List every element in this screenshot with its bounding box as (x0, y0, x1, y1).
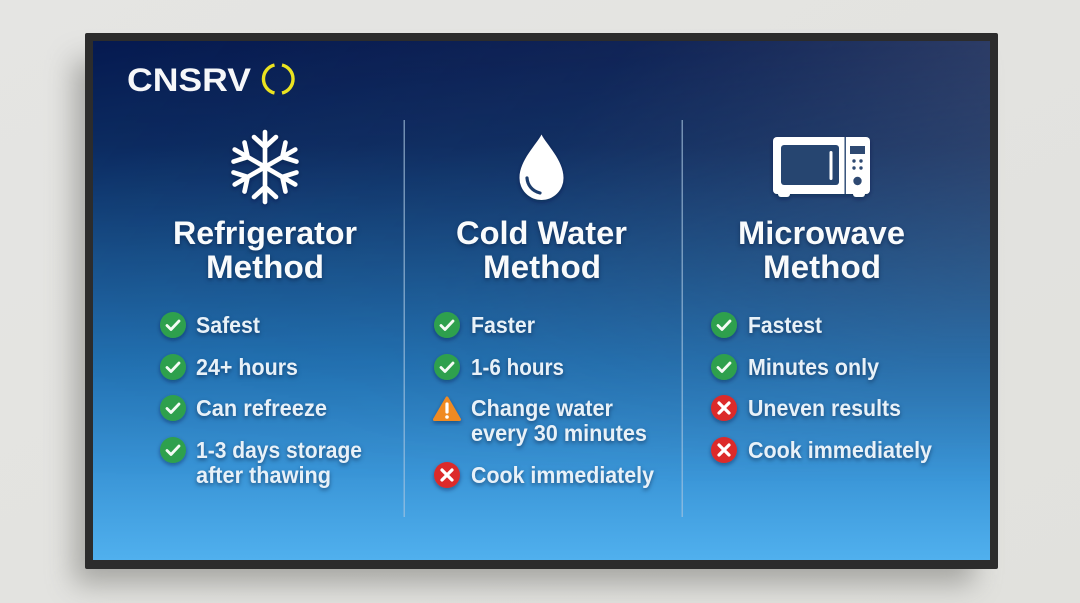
tv shadow on wall (74, 60, 974, 584)
panel: microwave method (711, 137, 932, 463)
list: cold water points: 1-6 hours (471, 354, 564, 380)
heading: microwave method: Microwave (738, 215, 905, 251)
list: cold water points: Cook immediately (471, 462, 654, 488)
heading: cold water method (456, 215, 627, 285)
list: refrigerator points: 24+ hours (196, 354, 298, 380)
icon: microwave (773, 137, 870, 197)
tv frame (85, 33, 998, 569)
list: cold water points (434, 312, 654, 488)
logo: CNSRV (127, 62, 293, 98)
list: refrigerator points: after thawing (196, 462, 331, 488)
list: refrigerator points: 1-3 days storage (196, 437, 362, 463)
panel: refrigerator method (160, 132, 362, 488)
list: cold water points: Change water (471, 395, 613, 421)
heading: cold water method: Cold Water (456, 215, 627, 251)
heading: microwave method: Method (763, 249, 881, 285)
heading: refrigerator method (173, 215, 357, 285)
list: refrigerator points (160, 312, 362, 488)
icon: snowflake (229, 132, 301, 202)
divider left (404, 120, 405, 517)
list: cold water points: every 30 minutes (471, 420, 647, 446)
heading: microwave method (738, 215, 905, 285)
icon: warning (434, 398, 460, 420)
panel: cold water method (434, 134, 654, 488)
heading: refrigerator method: Method (206, 249, 324, 285)
list: refrigerator points: Can refreeze (196, 395, 327, 421)
list: microwave points (711, 312, 932, 463)
icon: water drop (520, 134, 564, 200)
list: microwave points: Uneven results (748, 395, 901, 421)
logo brackets (263, 65, 293, 93)
divider right (682, 120, 683, 517)
list: microwave points: Fastest (748, 312, 822, 338)
logo: CNSRV: CNSRV (127, 62, 252, 98)
list: microwave points: Minutes only (748, 354, 879, 380)
heading: refrigerator method: Refrigerator (173, 215, 357, 251)
list: cold water points: Faster (471, 312, 535, 338)
list: microwave points: Cook immediately (748, 437, 932, 463)
screen panel (93, 41, 990, 560)
heading: cold water method: Method (483, 249, 601, 285)
list: refrigerator points: Safest (196, 312, 260, 338)
